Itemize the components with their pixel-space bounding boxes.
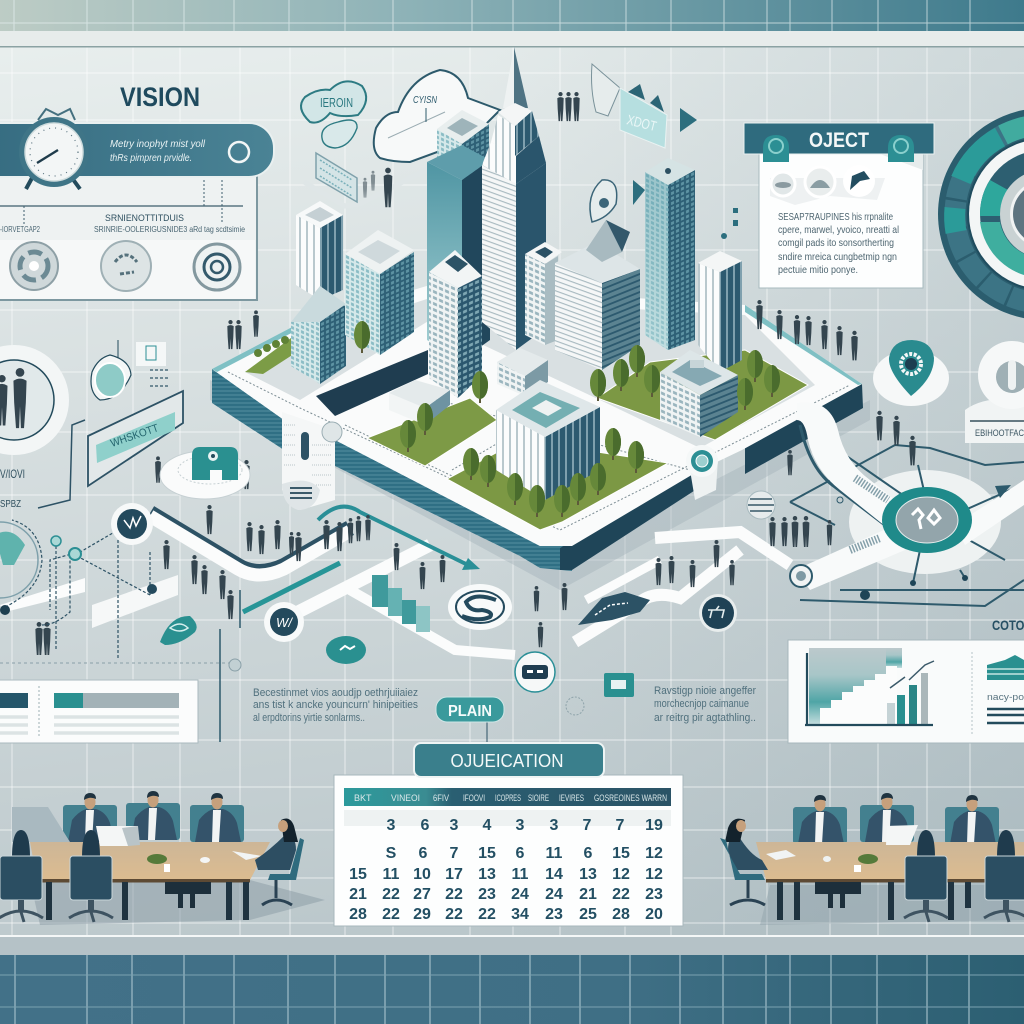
calendar numbers: 7 bbox=[616, 817, 625, 834]
calendar numbers: S bbox=[386, 845, 397, 862]
text block left: Becestinmet vios aoudjp oethrjuiiaiez bbox=[253, 687, 418, 699]
objective button: OJUEICATION bbox=[450, 751, 564, 771]
building: glass left bbox=[291, 286, 346, 384]
object sheet bbox=[759, 154, 923, 288]
lawn right bbox=[597, 350, 808, 440]
table items right bbox=[766, 850, 878, 872]
building: front center bbox=[496, 380, 600, 500]
calendar numbers: 22 bbox=[478, 906, 496, 923]
teal sign: XDOT bbox=[625, 111, 659, 134]
seated woman left bbox=[255, 818, 304, 905]
left label text: SPBZ bbox=[0, 499, 21, 510]
building: front right bbox=[660, 350, 738, 437]
object header bbox=[744, 123, 934, 162]
seated woman right bbox=[720, 819, 768, 905]
calendar numbers: 22 bbox=[612, 886, 630, 903]
calendar numbers: 3 bbox=[550, 817, 559, 834]
dark inner wall bbox=[316, 350, 428, 416]
calendar numbers: 4 bbox=[483, 817, 492, 834]
tower: teal right bbox=[645, 158, 695, 350]
chart colored bars bbox=[887, 673, 928, 725]
calendar numbers: 11 bbox=[383, 866, 400, 883]
vision sub panel: -IORVETGAP2 bbox=[0, 225, 40, 234]
mini area chart bbox=[987, 655, 1024, 723]
calendar header row: VINEOI bbox=[391, 793, 420, 803]
panel: info badge right bbox=[965, 341, 1024, 443]
panel: vision bbox=[0, 82, 274, 300]
chart white steps bbox=[820, 666, 897, 725]
calendar numbers: 6 bbox=[419, 845, 428, 862]
object sheet: cpere, marwel, yvoico, nreatti al bbox=[778, 224, 899, 236]
hub connecting lines bbox=[790, 445, 1024, 606]
platform left wall bbox=[212, 369, 284, 450]
calendar numbers: 22 bbox=[382, 906, 400, 923]
building: mid front tower bbox=[429, 250, 482, 398]
table top right bbox=[756, 842, 1024, 920]
tower: white right bbox=[698, 251, 742, 372]
calendar numbers: 28 bbox=[612, 906, 630, 923]
calendar header row: BKT bbox=[354, 793, 372, 803]
object sheet: SESAP7RAUPINES his rrpnalite bbox=[778, 211, 893, 223]
cloud 2: CYISN bbox=[413, 95, 438, 106]
icon: swirl badge bbox=[10, 242, 58, 290]
text block right bbox=[654, 685, 756, 724]
tower: rear teal bbox=[427, 110, 490, 360]
calendar numbers: 14 bbox=[545, 866, 563, 883]
platform shadow bbox=[210, 380, 870, 590]
vision sub panel: SRINRIE-OOLERIGUSNIDE3 aRd tag scdtsimie bbox=[94, 225, 245, 234]
trees bbox=[400, 345, 780, 517]
icon: teal blob lower bbox=[326, 636, 366, 664]
icon: round badge bbox=[101, 241, 151, 291]
calendar numbers: 23 bbox=[645, 886, 663, 903]
front chairs left bbox=[0, 830, 113, 922]
meeting table right bbox=[720, 793, 1024, 925]
calendar numbers: 27 bbox=[413, 886, 431, 903]
platform front right wall bbox=[560, 470, 700, 570]
bottom floor band bbox=[0, 935, 1024, 1024]
text block right: Ravstigp nioie angeffer bbox=[654, 685, 756, 697]
plain button bbox=[436, 697, 504, 744]
floor shadow right bbox=[760, 885, 1024, 925]
calendar bbox=[334, 775, 683, 926]
icon: dark disc right bbox=[699, 594, 737, 632]
text block left bbox=[253, 687, 418, 724]
mini area chart: nacy-po bbox=[987, 692, 1024, 702]
text block right: ar reitrg pir agtathling.. bbox=[654, 712, 756, 724]
inner courtyards bbox=[245, 298, 815, 448]
platform front wall bbox=[335, 440, 572, 571]
calendar numbers: 20 bbox=[645, 906, 663, 923]
hub base ellipse bbox=[849, 470, 1001, 574]
bubble marker bbox=[590, 180, 617, 222]
calendar numbers: 10 bbox=[413, 866, 431, 883]
objective button bbox=[414, 743, 604, 777]
building: narrow mid bbox=[525, 242, 562, 345]
light ramp bbox=[92, 575, 178, 628]
teal sign bbox=[592, 64, 667, 148]
lawn front bbox=[447, 440, 668, 530]
calendar numbers: 19 bbox=[645, 817, 663, 834]
icon: teal building on plinth bbox=[160, 447, 250, 499]
teal arrow path bbox=[318, 507, 470, 566]
road dash lines bbox=[228, 372, 850, 530]
vision sub panel bbox=[0, 172, 257, 300]
calendar numbers: 12 bbox=[645, 845, 663, 862]
vision sub panel: SRNIENOTTITDUIS bbox=[105, 213, 184, 224]
clouds and floating signs bbox=[301, 64, 738, 239]
icon: teal 3D bars bbox=[372, 575, 430, 632]
calendar header row: 6FIV bbox=[433, 793, 449, 803]
calendar numbers: 12 bbox=[612, 866, 630, 883]
calendar numbers: 3 bbox=[450, 817, 459, 834]
arrow marker bbox=[995, 485, 1011, 498]
calendar numbers: 12 bbox=[645, 866, 663, 883]
cloud 1: IEROIN bbox=[320, 95, 353, 110]
chart shaded columns bbox=[809, 648, 902, 725]
connector left ribbon bbox=[282, 412, 342, 510]
laptop left bbox=[96, 826, 140, 846]
calendar numbers: 3 bbox=[387, 817, 396, 834]
front chairs right bbox=[904, 830, 1024, 922]
calendar numbers: 6 bbox=[421, 817, 430, 834]
flag icons bbox=[633, 108, 738, 239]
table top left bbox=[30, 842, 270, 920]
calendar numbers: 21 bbox=[349, 886, 367, 903]
table items left bbox=[147, 851, 262, 872]
platform right wall bbox=[745, 384, 863, 474]
vision pill banner bbox=[0, 123, 274, 177]
calendar numbers: 25 bbox=[579, 906, 597, 923]
object sheet: sndire mreica cungbetmip ngn bbox=[778, 251, 897, 263]
calendar header row bbox=[344, 788, 671, 806]
left label text: V/IOVI bbox=[0, 467, 25, 481]
calendar header row: SIOIRE bbox=[528, 793, 549, 803]
WHSKOTT sign bbox=[38, 391, 183, 508]
calendar numbers: 7 bbox=[450, 845, 459, 862]
people groups bbox=[35, 92, 916, 655]
icon: alarm clock bbox=[19, 109, 89, 189]
teal strip bbox=[243, 563, 340, 612]
building: small left center bbox=[389, 380, 450, 425]
tilted screen bbox=[304, 153, 430, 206]
calendar header row: ICOPRES bbox=[495, 793, 521, 803]
vision pill banner: Metry inophyt mist yoll bbox=[110, 139, 206, 150]
text block right: morchecnjop caimanue bbox=[654, 698, 749, 710]
connector right badge bbox=[686, 445, 718, 500]
tree: by teal block bbox=[354, 321, 370, 353]
icon: location pin bbox=[873, 340, 949, 406]
calendar numbers: 24 bbox=[511, 886, 529, 903]
band lower bbox=[350, 590, 515, 655]
calendar numbers: 13 bbox=[579, 866, 597, 883]
icon: teal chip bbox=[566, 673, 634, 715]
chart: radial wheel bbox=[938, 108, 1024, 320]
top banner band bbox=[0, 0, 1024, 48]
building: small center rear bbox=[497, 348, 548, 396]
ribbon badge bbox=[790, 565, 812, 587]
calendar numbers bbox=[349, 817, 663, 923]
platform bbox=[210, 285, 870, 590]
lawn left center bbox=[367, 398, 497, 466]
meeting table left bbox=[0, 791, 325, 925]
object sheet: pectuie mitio ponye. bbox=[778, 264, 858, 276]
panel: object bbox=[744, 123, 934, 288]
calendar numbers: 23 bbox=[545, 906, 563, 923]
icon: white badge lower bbox=[515, 652, 555, 692]
calendar numbers: 22 bbox=[445, 906, 463, 923]
calendar numbers: 23 bbox=[478, 886, 496, 903]
calendar numbers: 15 bbox=[612, 845, 630, 862]
band left bbox=[150, 513, 350, 572]
icon: W dark disc bbox=[111, 503, 153, 545]
calendar numbers: 17 bbox=[445, 866, 463, 883]
seated row right bbox=[793, 793, 999, 844]
calendar numbers: 15 bbox=[349, 866, 367, 883]
floor shadow left bbox=[30, 880, 325, 925]
platform top bbox=[212, 285, 862, 546]
calendar numbers: 13 bbox=[478, 866, 496, 883]
calendar numbers: 7 bbox=[583, 817, 592, 834]
calendar numbers: 22 bbox=[382, 886, 400, 903]
panel: bar chart bbox=[788, 640, 1024, 743]
dots bbox=[910, 580, 916, 586]
icon: spiral badge bbox=[194, 244, 240, 290]
icon: W disc: W/ bbox=[276, 615, 293, 630]
plain button: PLAIN bbox=[448, 703, 492, 720]
icon: small badge left bbox=[91, 340, 170, 400]
icon: S logo bbox=[448, 584, 512, 630]
hedge row bbox=[254, 336, 289, 357]
object sheet: comgil pads ito sonsortherting bbox=[778, 237, 894, 249]
WHSKOTT sign: WHSKOTT bbox=[109, 422, 160, 450]
node dots bbox=[0, 536, 241, 671]
band lower right bbox=[575, 550, 740, 642]
calendar numbers: 28 bbox=[349, 906, 367, 923]
ribbon upper bbox=[800, 425, 885, 525]
laptop right bbox=[886, 825, 918, 845]
small striped disc bbox=[747, 491, 775, 519]
calendar header row: IFOOVI bbox=[463, 793, 485, 803]
cloud 2 bbox=[374, 70, 500, 162]
calendar header row: IEVIRES bbox=[559, 793, 584, 803]
building: large grey bbox=[555, 220, 640, 370]
vision heading: VISION bbox=[120, 82, 200, 112]
calendar numbers: 34 bbox=[511, 906, 529, 923]
left label text bbox=[0, 467, 25, 510]
ribbon lower bbox=[795, 525, 905, 590]
icon: star in ring bbox=[0, 522, 38, 598]
hub ring bbox=[882, 487, 972, 553]
skyline buildings bbox=[291, 47, 742, 500]
vision pill banner: thRs pimpren prvidle. bbox=[110, 153, 192, 164]
text block left: al erpdtorins yirtie sonlarms.. bbox=[253, 712, 365, 724]
calendar numbers: 6 bbox=[516, 845, 525, 862]
left lower panel bbox=[0, 680, 198, 743]
lawn far left bbox=[245, 335, 300, 374]
left people badge bbox=[0, 345, 69, 455]
seated row left bbox=[12, 791, 244, 842]
logic network left bbox=[0, 503, 241, 742]
calendar numbers: 6 bbox=[584, 845, 593, 862]
calendar numbers: 11 bbox=[512, 866, 529, 883]
tower: white rear left bbox=[296, 201, 343, 300]
band second bbox=[298, 545, 430, 612]
tower: spire bbox=[482, 47, 546, 350]
pathways centre bbox=[0, 507, 790, 655]
calendar numbers: 11 bbox=[546, 845, 563, 862]
calendar numbers: 22 bbox=[445, 886, 463, 903]
calendar numbers: 15 bbox=[478, 845, 496, 862]
object header: OJECT bbox=[809, 129, 869, 152]
chart axes and trend bbox=[805, 653, 933, 725]
right ribbon and hub bbox=[747, 402, 1024, 606]
building: teal block bbox=[345, 230, 414, 355]
icon: dark mountain bbox=[578, 592, 650, 625]
calendar header row: GOSREOINES WARRN bbox=[594, 793, 667, 803]
calendar numbers: 24 bbox=[545, 886, 563, 903]
text block left: ans tist k ancke youncurn' hinipeities bbox=[253, 699, 418, 711]
icon: teal blob left bbox=[160, 616, 197, 645]
cloud 1 bbox=[301, 81, 366, 148]
calendar numbers: 29 bbox=[413, 906, 431, 923]
icon: W disc bbox=[264, 602, 304, 642]
calendar numbers: 3 bbox=[516, 817, 525, 834]
calendar numbers: 21 bbox=[579, 886, 597, 903]
